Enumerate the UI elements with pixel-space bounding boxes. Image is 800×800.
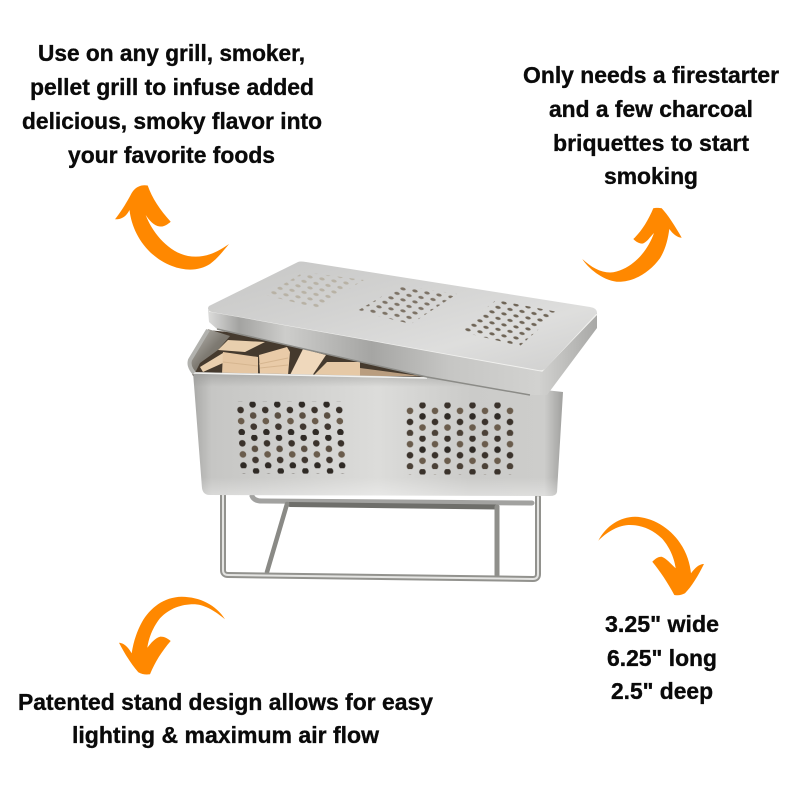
- box interior: [189, 330, 430, 378]
- text: dimensions: 2.5" deep: [611, 678, 713, 704]
- arrow: bottom right, pointing down: [598, 517, 704, 595]
- lid holes: [265, 272, 558, 346]
- text: only needs a firestarter: [523, 62, 779, 189]
- arrow: top right, pointing up: [582, 208, 682, 282]
- wood chips: [200, 340, 420, 376]
- text: use on any grill: [22, 40, 322, 168]
- box front: [193, 372, 563, 496]
- text: dimensions: 6.25" long: [607, 645, 717, 671]
- text: only needs a firestarter: Only needs a firestarter: [523, 62, 779, 88]
- text: dimensions: 3.25" wide: [605, 611, 719, 637]
- text: patented stand design: [18, 689, 433, 748]
- product: smoker box: [189, 262, 597, 579]
- text: use on any grill: Use on any grill, smoker,: [38, 40, 305, 66]
- text: use on any grill: pellet grill to infuse added: [30, 74, 314, 100]
- text: dimensions: [605, 611, 719, 704]
- text: patented stand design: lighting & maximum air flow: [72, 722, 379, 748]
- arrow: top left, pointing up: [115, 185, 229, 270]
- text: use on any grill: delicious, smoky flavor into: [22, 108, 322, 134]
- text: patented stand design: Patented stand design allows for easy: [18, 689, 433, 715]
- lid top: [208, 262, 597, 370]
- box rim: [190, 330, 208, 373]
- text: only needs a firestarter: smoking: [604, 163, 698, 189]
- text: only needs a firestarter: briquettes to start: [553, 130, 749, 156]
- stand: [223, 495, 538, 579]
- front holes right: [404, 402, 516, 474]
- front holes left: [234, 402, 349, 474]
- lid side: [208, 310, 597, 395]
- text: use on any grill: your favorite foods: [68, 142, 275, 168]
- inner wall: [190, 329, 230, 373]
- text: only needs a firestarter: and a few charcoal: [549, 96, 753, 122]
- arrow: bottom left, pointing down: [119, 597, 225, 675]
